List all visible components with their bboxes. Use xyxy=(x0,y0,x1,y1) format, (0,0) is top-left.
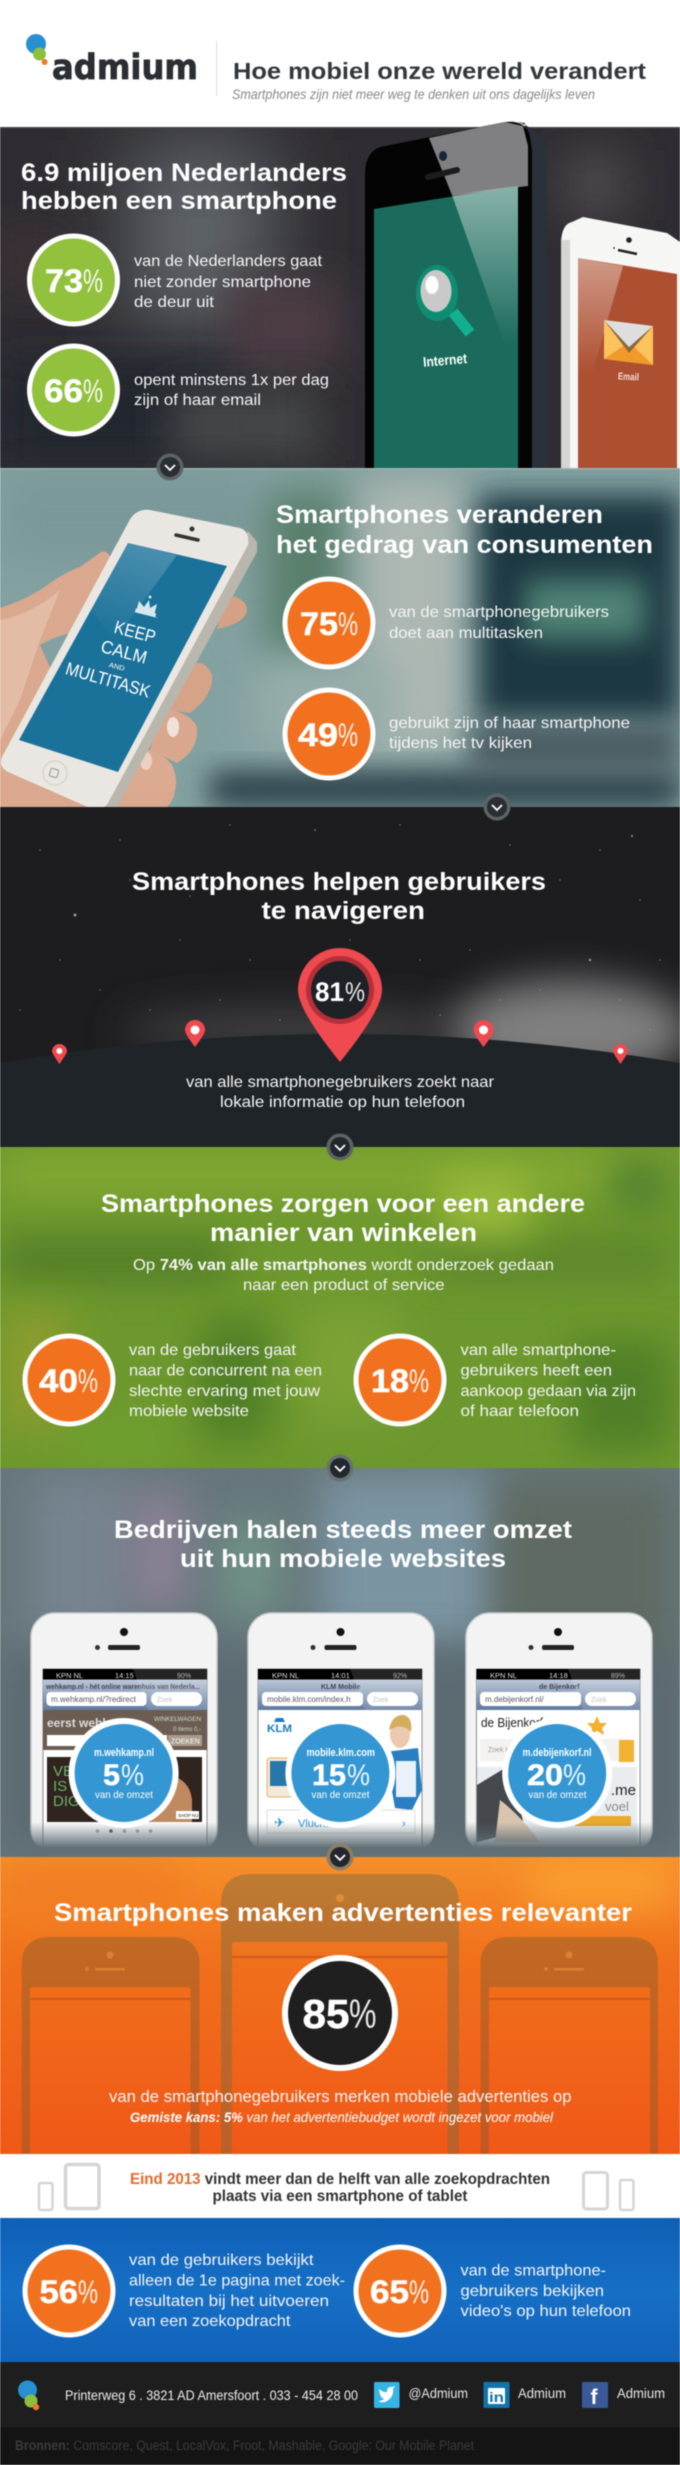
phone: KLM: › xyxy=(402,1818,406,1830)
text 49%: gebruikt zijn of haar smartphone xyxy=(389,715,630,732)
phone: KLM: KLM xyxy=(267,1723,292,1735)
icon: linkedin xyxy=(484,2382,510,2408)
text 40% xyxy=(129,1342,322,1420)
white phone xyxy=(561,217,680,468)
heading: Smartphones maken advertenties relevanter xyxy=(54,1899,632,1927)
heading: uit hun mobiele websites xyxy=(180,1545,506,1573)
text 40%: van de gebruikers gaat xyxy=(129,1342,297,1359)
text 56% xyxy=(129,2252,345,2330)
stat 85%: % xyxy=(349,1991,376,2037)
text 18% xyxy=(460,1342,636,1420)
footer logo xyxy=(18,2380,39,2410)
panel: navigeren xyxy=(0,807,680,1147)
phone: Bijenkorf: m.debijenkorf.nl/ xyxy=(485,1695,544,1704)
logo xyxy=(26,34,198,88)
badge: klm 15%: % xyxy=(347,1759,370,1792)
text 75% xyxy=(389,604,609,642)
text 56%: resultaten bij het uitvoeren xyxy=(129,2293,329,2310)
phone: wehkamp: IS xyxy=(53,1778,67,1795)
text 81%: lokale informatie op hun telefoon xyxy=(220,1094,465,1111)
phone: Bijenkorf: de Bijenkorf xyxy=(539,1684,580,1691)
icon: facebook xyxy=(582,2382,608,2409)
stat 65%: % xyxy=(409,2274,429,2310)
text 65%: gebruikers bekijken xyxy=(460,2283,604,2300)
text 49%: tijdens het tv kijken xyxy=(389,735,532,752)
panel: advertenties xyxy=(0,1857,680,2154)
keep calm text: KEEP xyxy=(112,617,158,647)
stat 66%: % xyxy=(83,373,103,409)
phone: wehkamp: 0 items 0,- xyxy=(173,1727,201,1733)
phone: wehkamp: eerst wehkamp xyxy=(47,1716,134,1730)
phone: Bijenkorf: de Bijenkorf xyxy=(481,1715,543,1730)
phone: KLM xyxy=(248,1613,434,1854)
stat 66%: 66 xyxy=(44,373,83,409)
title: Hoe mobiel onze wereld verandert xyxy=(233,58,646,84)
text xyxy=(130,2171,550,2205)
intro text: naar een product of service xyxy=(243,1277,445,1294)
stat 49%: % xyxy=(338,717,358,753)
small pin left outer xyxy=(52,1044,67,1064)
stat 40% xyxy=(22,1334,116,1426)
text 18%: of haar telefoon xyxy=(460,1403,579,1420)
heading: manier van winkelen xyxy=(210,1219,477,1247)
icon: devices right xyxy=(584,2172,634,2210)
keep calm text xyxy=(63,617,158,702)
badge: wehkamp 5%: % xyxy=(121,1759,144,1792)
heading xyxy=(276,501,653,559)
badge: bijenkorf 20% xyxy=(502,1718,612,1828)
phone: wehkamp: WINKELWAGEN xyxy=(154,1717,201,1723)
phone: wehkamp: 90% xyxy=(177,1673,191,1680)
stat 40%: 40 xyxy=(39,1363,78,1399)
phone: KLM: 14:01 xyxy=(331,1671,350,1680)
phone silhouettes xyxy=(22,1874,658,2154)
text 49% xyxy=(389,715,630,752)
text 66% xyxy=(134,372,329,409)
icon: twitter xyxy=(374,2382,400,2408)
badge: klm 15%: van de omzet xyxy=(312,1789,370,1801)
stat 75%: % xyxy=(338,606,358,642)
badge: klm 15% xyxy=(285,1718,395,1828)
badge: wehkamp 5%: m.wehkamp.nl xyxy=(94,1747,154,1759)
text 75%: van de smartphonegebruikers xyxy=(389,604,609,621)
stat 75% xyxy=(282,576,376,670)
stat 65% xyxy=(354,2244,446,2338)
heading: hebben een smartphone xyxy=(21,187,337,215)
heading xyxy=(21,159,347,215)
text 65%: video's op hun telefoon xyxy=(460,2303,631,2320)
big pin 81% xyxy=(298,948,382,1062)
big pin 81%: 81 xyxy=(315,977,344,1007)
text 18%: gebruikers heeft een xyxy=(460,1362,612,1380)
heading: Bedrijven halen steeds meer omzet xyxy=(114,1516,573,1544)
text 66%: zijn of haar email xyxy=(134,392,261,409)
heading: Smartphones helpen gebruikers xyxy=(132,868,546,896)
heading: te navigeren xyxy=(262,897,425,925)
sources: Bronnen: Comscore, Quest, LocalVox, Froot, Mashable, Google: Our Mobile Planet xyxy=(15,2438,474,2453)
phone: KLM: KPN NL xyxy=(272,1671,299,1680)
stat 65%: 65 xyxy=(370,2274,409,2310)
label Email: Email xyxy=(618,371,639,384)
intro text xyxy=(133,1257,554,1294)
text 56%: alleen de 1e pagina met zoek- xyxy=(129,2272,345,2290)
stat 56% xyxy=(22,2244,116,2338)
text 65%: van de smartphone- xyxy=(460,2262,606,2280)
phone: Bijenkorf: 14:18 xyxy=(549,1671,568,1680)
badge: klm 15%: mobile.klm.com xyxy=(306,1747,375,1759)
phone: wehkamp: 14:15 xyxy=(115,1671,134,1680)
badge: bijenkorf 20%: m.debijenkorf.nl xyxy=(522,1747,592,1759)
text 73%: de deur uit xyxy=(134,294,215,311)
keep calm text: MULTITASK xyxy=(63,658,153,702)
text 75%: doet aan multitasken xyxy=(389,625,543,642)
address: Printerweg 6 . 3821 AD Amersfoort . 033 - 454 28 00 xyxy=(65,2388,358,2403)
badge: wehkamp 5% xyxy=(69,1718,179,1828)
black phone xyxy=(365,121,547,468)
text 73%: van de Nederlanders gaat xyxy=(134,253,323,270)
heading: 6.9 miljoen Nederlanders xyxy=(21,159,347,187)
text 18%: aankoop gedaan via zijn xyxy=(460,1383,636,1400)
heading xyxy=(114,1516,573,1573)
keep calm text: CALM xyxy=(99,636,149,668)
phone: Bijenkorf: Zoek t xyxy=(488,1747,508,1754)
stat 75%: 75 xyxy=(300,606,338,642)
panel: omzet mobiele websites xyxy=(0,1468,680,1857)
label Internet: Internet xyxy=(422,350,468,370)
stat 73% xyxy=(27,234,120,326)
stat 85% xyxy=(282,1955,398,2071)
phone: KLM: 92% xyxy=(393,1673,407,1680)
arrow 3 xyxy=(326,1134,354,1160)
small pin left xyxy=(185,1020,205,1047)
text 56%: van een zoekopdracht xyxy=(129,2313,291,2330)
text 40%: slechte ervaring met jouw xyxy=(129,1383,320,1400)
stat 73%: 73 xyxy=(45,263,83,299)
text 73% xyxy=(134,253,323,311)
text 66%: opent minstens 1x per dag xyxy=(134,372,329,389)
phone: Bijenkorf: Zoek xyxy=(591,1697,607,1704)
badge: klm 15%: 15 xyxy=(312,1759,346,1792)
header xyxy=(0,0,680,127)
text 40%: naar de concurrent na een xyxy=(129,1362,322,1380)
small pin right outer xyxy=(613,1044,628,1064)
arrow 2 xyxy=(484,794,510,820)
stat 49%: 49 xyxy=(298,717,338,753)
phone: Bijenkorf: .me xyxy=(611,1782,636,1799)
stat 73%: % xyxy=(83,263,103,299)
heading: het gedrag van consumenten xyxy=(276,531,653,559)
badge: wehkamp 5%: 5 xyxy=(103,1759,120,1792)
stat 18%: % xyxy=(409,1363,429,1399)
small pin right xyxy=(474,1020,494,1047)
panel: 6.9 miljoen smartphones xyxy=(0,121,680,468)
phone: Bijenkorf xyxy=(466,1613,652,1853)
panel: zoeken en video xyxy=(0,2218,680,2362)
phone: Bijenkorf: KPN NL xyxy=(490,1671,517,1680)
twitter label: @Admium xyxy=(408,2386,468,2401)
subtitle: Smartphones zijn niet meer weg te denken uit ons dagelijks leven xyxy=(232,86,595,102)
logo: admium xyxy=(52,48,198,88)
stat 66% xyxy=(27,344,120,436)
hand holding phone xyxy=(0,510,257,851)
text 65% xyxy=(460,2262,631,2320)
phones row xyxy=(31,1613,652,1854)
stat 18%: 18 xyxy=(371,1363,409,1399)
big pin 81%: % xyxy=(345,977,365,1007)
arrow 5 xyxy=(326,1844,354,1870)
panel: gedrag van consumenten xyxy=(0,468,680,808)
icon: devices left xyxy=(39,2164,99,2210)
stat 40%: % xyxy=(78,1363,98,1399)
icon: crown xyxy=(135,596,158,618)
linkedin label: Admium xyxy=(518,2386,566,2401)
badge: bijenkorf 20%: 20 xyxy=(527,1759,563,1792)
missed chance note: Gemiste kans: 5% van het advertentiebudget wordt ingezet voor mobiel xyxy=(130,2110,554,2125)
phone: wehkamp: VE xyxy=(53,1763,73,1780)
phone: Bijenkorf: voel xyxy=(605,1799,629,1814)
phone: wehkamp xyxy=(31,1613,217,1854)
band: eind 2013 xyxy=(0,2154,680,2218)
arrow 4 xyxy=(326,1454,354,1482)
arrow 1 xyxy=(156,454,184,480)
stat 56%: 56 xyxy=(40,2274,78,2310)
heading xyxy=(101,1190,585,1247)
stat 56%: % xyxy=(78,2274,98,2310)
phone: KLM: KLM Mobile xyxy=(321,1684,360,1691)
phone: wehkamp: SHOP NU xyxy=(178,1813,198,1818)
planet horizon xyxy=(0,1034,680,1147)
phone: KLM: Zoek xyxy=(373,1697,389,1704)
phone: wehkamp: wehkamp.nl - hét online warenhuis van Nederla... xyxy=(45,1684,200,1691)
phone: wehkamp: DIG xyxy=(53,1793,80,1810)
badge: wehkamp 5%: van de omzet xyxy=(95,1789,153,1801)
panel: winkelen xyxy=(0,1147,680,1468)
facebook label: Admium xyxy=(617,2386,665,2401)
text 81% xyxy=(186,1074,495,1111)
phone xyxy=(1,510,257,815)
phone: wehkamp: ZOEKEN xyxy=(171,1738,200,1746)
intro text: Op 74% van alle smartphones wordt onderzoek gedaan xyxy=(133,1257,554,1274)
stat 18% xyxy=(354,1334,446,1426)
icon: magnifier xyxy=(416,265,470,333)
text 56%: van de gebruikers bekijkt xyxy=(129,2252,314,2269)
badge: bijenkorf 20%: van de omzet xyxy=(528,1789,587,1801)
text 81%: van alle smartphonegebruikers zoekt naar xyxy=(186,1074,495,1091)
phone: wehkamp: KPN NL xyxy=(56,1671,83,1680)
stat 85%: 85 xyxy=(302,1991,350,2037)
heading xyxy=(132,868,546,925)
text 40%: mobiele website xyxy=(129,1403,249,1420)
text: plaats via een smartphone of tablet xyxy=(212,2188,468,2205)
stat 49% xyxy=(282,688,376,780)
phone: KLM: mobile.klm.com/index.h xyxy=(267,1695,351,1704)
text 73%: niet zonder smartphone xyxy=(134,274,311,291)
keep calm text: AND xyxy=(108,662,125,673)
icon: facebook: f xyxy=(590,2386,598,2409)
stars xyxy=(19,824,661,1031)
phone: KLM: ✈ xyxy=(274,1815,285,1830)
text 18%: van alle smartphone- xyxy=(460,1342,616,1359)
badge: bijenkorf 20%: % xyxy=(563,1759,586,1792)
heading: Smartphones zorgen voor een andere xyxy=(101,1190,585,1218)
phone: Bijenkorf: 89% xyxy=(611,1673,625,1680)
phone: wehkamp: Zoek xyxy=(157,1697,173,1704)
phone: KLM: Vlucht xyxy=(298,1818,329,1830)
icon: envelope xyxy=(604,320,653,365)
text 85%: van de smartphonegebruikers merken mobiele advertenties op xyxy=(109,2087,572,2106)
heading: Smartphones veranderen xyxy=(276,501,603,529)
phone: wehkamp: m.wehkamp.nl/?redirect xyxy=(51,1695,137,1704)
icon: linkedin: in xyxy=(489,2389,504,2405)
footer xyxy=(0,2362,680,2465)
text: Eind 2013 vindt meer dan de helft van alle zoekopdrachten xyxy=(130,2171,550,2188)
